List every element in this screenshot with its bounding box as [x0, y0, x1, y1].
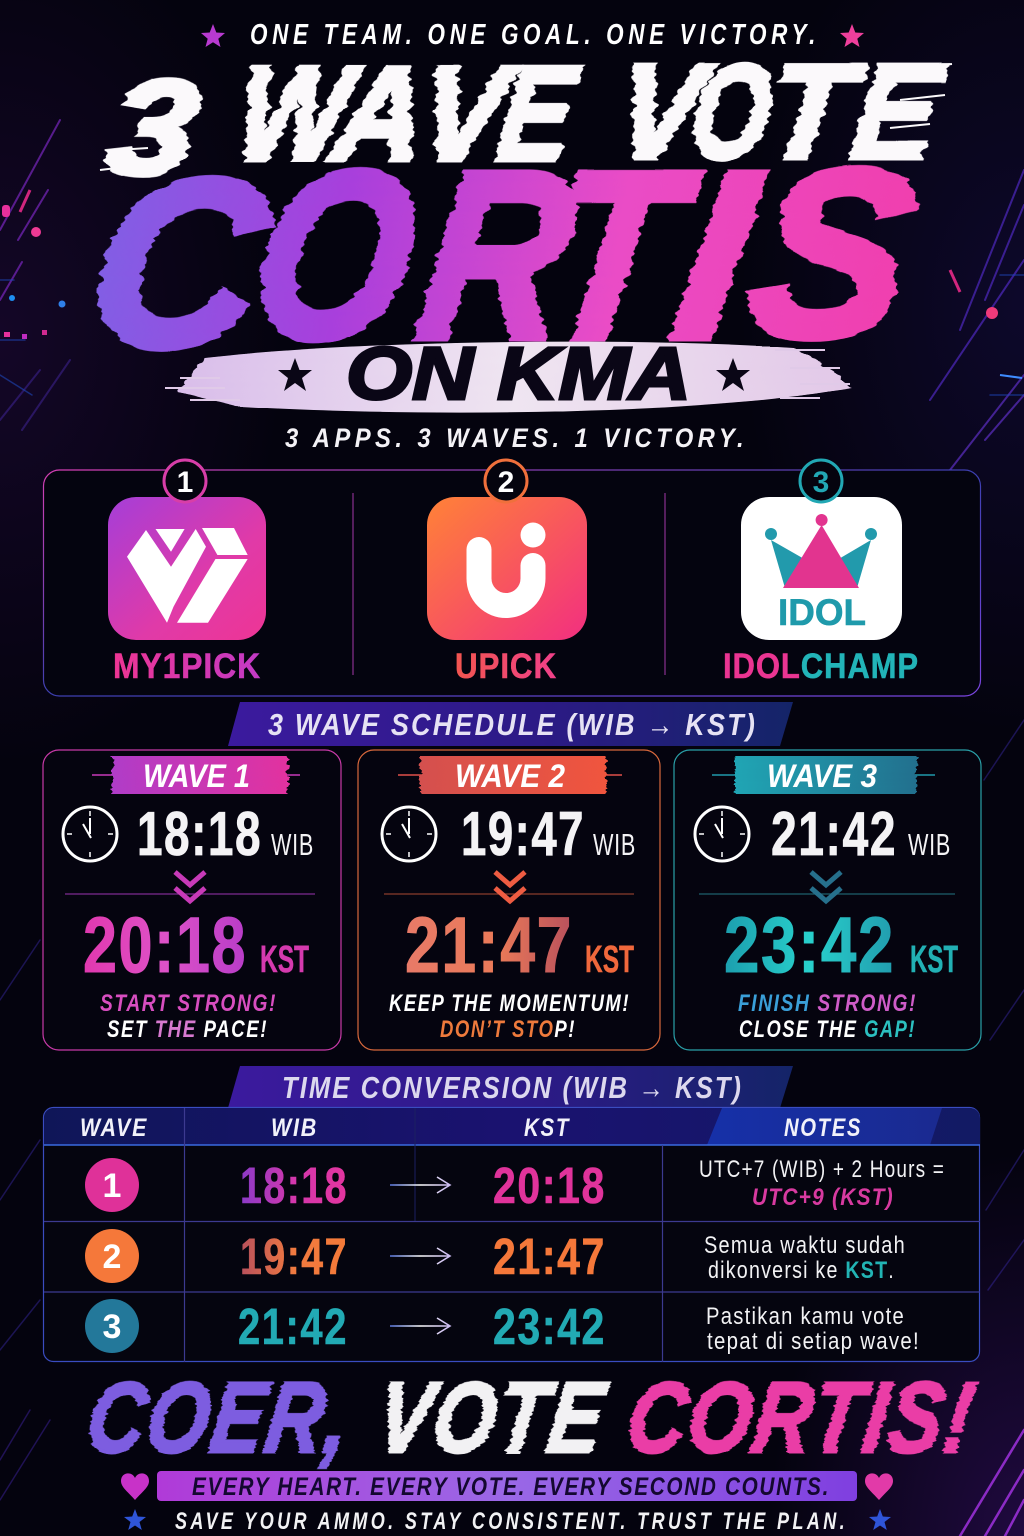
badge: number 3: 3 — [813, 466, 829, 499]
title: 3 wave vote: E — [490, 38, 586, 189]
badge: number 3 — [800, 460, 842, 502]
row 3 — [85, 1298, 920, 1355]
app: idolchamp: IDOLCHAMP — [723, 647, 919, 686]
title: cortis: C — [76, 130, 284, 398]
title: 3 wave vote: V — [608, 36, 720, 187]
tagline: one team: ONE TEAM. ONE GOAL. ONE VICTORY. — [250, 19, 820, 51]
panel: apps — [44, 460, 980, 696]
icon: dark star right — [716, 358, 750, 391]
slogan: FINISH STRONG! — [738, 990, 917, 1017]
note: tepat di setiap wave! — [707, 1328, 920, 1355]
row 1 — [85, 1156, 945, 1214]
slogan — [100, 990, 277, 1043]
note — [706, 1303, 920, 1355]
time: 21:42 wib: 21:42 — [771, 800, 897, 869]
slogan: CLOSE THE GAP! — [739, 1016, 916, 1043]
note: Pastikan kamu vote — [706, 1303, 905, 1330]
badge: row 3 — [85, 1299, 139, 1353]
note: dikonversi ke KST. — [708, 1257, 895, 1284]
row 3: 23:42 — [493, 1298, 606, 1355]
title: 3 wave vote: 3 — [98, 52, 207, 203]
slogan — [738, 990, 917, 1043]
badge: number 1: 1 — [177, 466, 193, 499]
footer slogan: coer vote cortis — [81, 1362, 983, 1474]
icon: pink star right — [840, 24, 864, 47]
app: idolchamp — [723, 460, 919, 686]
icon: clock — [695, 807, 749, 861]
title: cortis: T — [531, 122, 710, 390]
icon: my1pick logo — [127, 528, 248, 623]
icon: idol crown: IDOL — [778, 592, 866, 633]
heading: time conversion: TIME CONVERSION (WIB → KST) — [282, 1070, 743, 1105]
time: 19:47 wib: WIB — [593, 827, 636, 862]
title: 3 wave vote: E — [844, 36, 951, 187]
icon: chevrons — [175, 872, 205, 901]
row 1: 20:18 — [493, 1157, 606, 1214]
footer slogan: coer vote cortis: VOTE — [371, 1362, 613, 1474]
banner: on kma — [165, 332, 850, 415]
slogan: SET THE PACE! — [107, 1016, 268, 1043]
time: 21:47 kst: KST — [585, 939, 634, 981]
note: UTC+7 (WIB) + 2 Hours = — [699, 1156, 945, 1183]
title: 3 wave vote: T — [758, 36, 872, 187]
icon: chevrons — [495, 872, 525, 901]
note: Semua waktu sudah — [704, 1232, 906, 1259]
title: cortis: R — [405, 122, 589, 390]
badge: number 2 — [485, 460, 527, 502]
table header: KST — [524, 1114, 571, 1142]
icon: blue star left — [124, 1509, 146, 1530]
title: cortis: I — [661, 122, 774, 390]
time: 19:47 wib: 19:47 — [461, 800, 585, 869]
icon: heart right — [865, 1473, 893, 1500]
icon: chevrons — [811, 872, 841, 901]
footer slogan: coer vote cortis: COER, — [81, 1362, 359, 1474]
time: 21:47 kst: 21:47 — [405, 900, 573, 989]
row 1: 18:18 — [240, 1157, 348, 1214]
time: 20:18 kst: 20:18 — [83, 900, 247, 989]
badge: wave 3 — [712, 756, 935, 794]
row 2: 19:47 — [240, 1228, 348, 1285]
title: 3 wave vote — [98, 36, 952, 203]
title: cortis: O — [239, 122, 431, 390]
time: 20:18 kst: KST — [260, 939, 309, 981]
banner: on kma: ON KMA — [346, 332, 691, 415]
icon: upick logo — [479, 522, 546, 606]
title: 3 wave vote: W — [228, 38, 368, 189]
row 2 — [85, 1228, 906, 1285]
note — [699, 1156, 945, 1211]
slogan: KEEP THE MOMENTUM! — [389, 990, 630, 1017]
badge: row 3: 3 — [103, 1308, 121, 1346]
card: wave 2 — [358, 750, 660, 1050]
table header: WAVE — [80, 1114, 148, 1142]
time: 21:42 wib: WIB — [908, 827, 951, 862]
badge: number 1 — [164, 460, 206, 502]
title: cortis: S — [735, 120, 929, 388]
time: 18:18 wib: WIB — [271, 827, 314, 862]
icon: dark star left — [278, 358, 312, 391]
badge: wave 1: WAVE 1 — [143, 758, 250, 794]
arrow — [390, 1248, 450, 1264]
badge: wave 2 — [398, 756, 622, 794]
banner: every heart: EVERY HEART. EVERY VOTE. EVERY SECOND COUNTS. — [192, 1473, 830, 1501]
icon: clock — [382, 807, 436, 861]
table header: WIB — [271, 1114, 318, 1142]
badge: row 1 — [85, 1158, 139, 1212]
card: wave 3 — [674, 750, 981, 1050]
time: 23:42 kst: 23:42 — [724, 900, 895, 989]
table header: NOTES — [784, 1114, 862, 1142]
badge: wave 3: WAVE 3 — [767, 758, 877, 794]
arrow — [390, 1177, 450, 1193]
icon: clock — [63, 807, 117, 861]
row 2: 21:47 — [493, 1228, 606, 1285]
table: time conversion — [44, 1108, 980, 1362]
title: cortis — [76, 120, 929, 398]
app: my1pick — [108, 460, 266, 686]
note: UTC+9 (KST) — [752, 1184, 894, 1211]
time: 23:42 kst: KST — [910, 939, 958, 981]
icon: pink star left — [201, 24, 225, 47]
badge: number 2: 2 — [498, 466, 514, 499]
slogan: DON’T STOP! — [440, 1016, 576, 1043]
subtitle: 3 apps: 3 APPS. 3 WAVES. 1 VICTORY. — [285, 423, 748, 453]
icon: blue star right — [869, 1509, 891, 1530]
badge: wave 2: WAVE 2 — [455, 758, 565, 794]
app: my1pick: MY1PICK — [113, 647, 261, 686]
slogan — [389, 990, 630, 1043]
title: 3 wave vote: O — [682, 36, 781, 187]
badge: row 2 — [85, 1229, 139, 1283]
row 3: 21:42 — [238, 1298, 348, 1355]
time: 18:18 wib: 18:18 — [137, 800, 262, 869]
icon: idol crown — [765, 514, 877, 633]
slogan: START STRONG! — [100, 990, 277, 1017]
badge: wave 1 — [92, 756, 300, 794]
title: 3 wave vote: V — [410, 38, 524, 189]
note — [704, 1232, 906, 1284]
app: upick — [427, 460, 587, 686]
card: wave 1 — [43, 750, 341, 1050]
app: upick: UPICK — [455, 647, 557, 686]
icon: heart left — [121, 1473, 149, 1500]
badge: row 1: 1 — [103, 1167, 121, 1205]
heading: 3 wave schedule: 3 WAVE SCHEDULE (WIB → KST) — [268, 707, 757, 742]
table header — [44, 1108, 980, 1145]
badge: row 2: 2 — [103, 1238, 121, 1276]
arrow — [390, 1318, 450, 1334]
title: 3 wave vote: A — [323, 38, 435, 189]
